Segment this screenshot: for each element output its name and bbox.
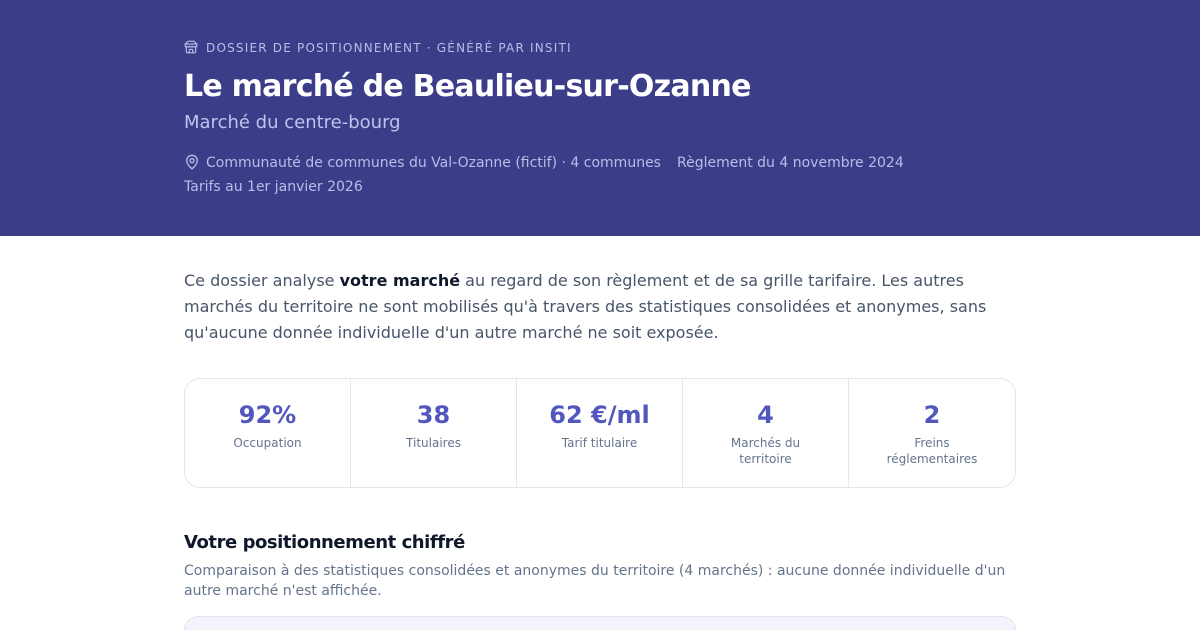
- section description: autre marché n'est affichée.: [184, 583, 382, 599]
- section description: [184, 563, 1005, 599]
- stat: occupation: Occupation: [233, 436, 302, 450]
- intro paragraph: marchés du territoire ne sont mobilisés qu'à travers des statistiques consolidées et anonymes, sans: [184, 297, 986, 316]
- intro paragraph: Ce dossier analyse votre marché au regard de son règlement et de sa grille tarifaire. Les autres: [184, 271, 964, 290]
- intro paragraph: [184, 271, 986, 342]
- intro paragraph: qu'aucune donnée individuelle d'un autre marché ne soit exposée.: [184, 323, 719, 342]
- stat: freins: Freins: [914, 436, 950, 450]
- icon: market store: [184, 40, 198, 54]
- stat: occupation: 92%: [239, 401, 296, 429]
- section heading: Votre positionnement chiffré: [184, 532, 465, 553]
- stat: freins: 2: [924, 401, 940, 429]
- stat: freins: [887, 401, 977, 466]
- subtitle: Marché du centre-bourg: [184, 112, 401, 133]
- stat: marchés: territoire: [739, 452, 792, 466]
- regulation date: Règlement du 4 novembre 2024: [677, 155, 904, 171]
- location: Communauté de communes du Val-Ozanne (fictif) · 4 communes: [206, 155, 661, 171]
- section description: Comparaison à des statistiques consolidées et anonymes du territoire (4 marchés) : aucune donnée individuelle d'un: [184, 563, 1005, 579]
- tariff date: Tarifs au 1er janvier 2026: [184, 179, 363, 195]
- icon: location pin: [186, 154, 198, 170]
- panel: comparison card: [184, 616, 1016, 630]
- header banner: [0, 0, 1200, 236]
- title: Le marché de Beaulieu-sur-Ozanne: [184, 69, 751, 104]
- stat: freins: réglementaires: [887, 452, 977, 466]
- stat: tarif: Tarif titulaire: [562, 436, 637, 450]
- eyebrow label: DOSSIER DE POSITIONNEMENT · GÉNÉRÉ PAR INSITI: [206, 41, 572, 55]
- stat: titulaires: [406, 401, 461, 450]
- stat: occupation: [233, 401, 302, 450]
- stat: marchés: Marchés du: [731, 436, 800, 450]
- stat: tarif: [549, 401, 650, 450]
- stat: titulaires: 38: [417, 401, 450, 429]
- stat: tarif: 62 €/ml: [549, 401, 650, 429]
- stat: marchés: [731, 401, 800, 466]
- stat: marchés: 4: [757, 401, 774, 429]
- panel: key figures: [184, 378, 1016, 488]
- stat: titulaires: Titulaires: [406, 436, 461, 450]
